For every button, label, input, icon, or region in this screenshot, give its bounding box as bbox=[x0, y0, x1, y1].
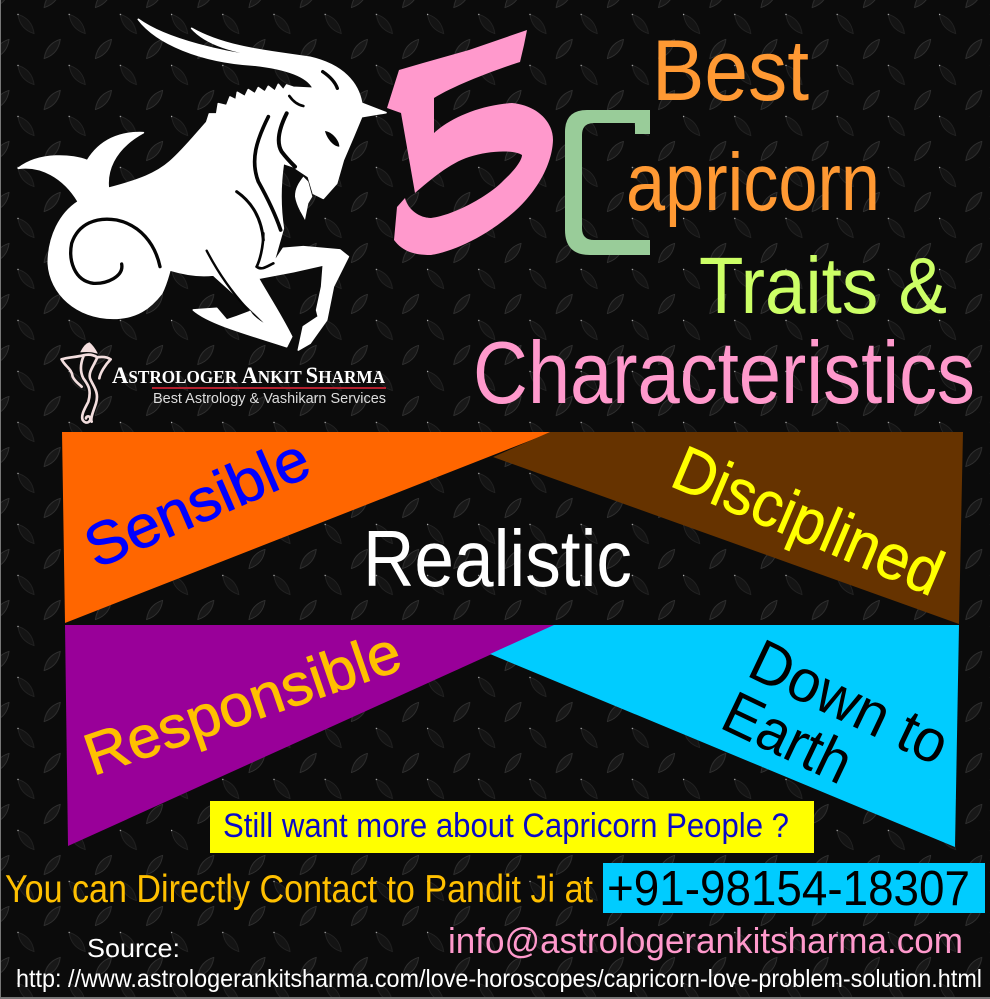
callout: more about capricorn bbox=[210, 801, 814, 853]
goat eye bbox=[325, 131, 339, 147]
logo text bbox=[112, 363, 386, 407]
big number 5 bbox=[387, 30, 553, 255]
logo text: ASTROLOGER ANKIT SHARMA bbox=[112, 363, 385, 388]
icon: ganesha logo mark bbox=[62, 343, 111, 423]
panel: sensible bbox=[62, 425, 552, 623]
panel: disciplined bbox=[493, 432, 963, 624]
text: source label: Source: bbox=[87, 933, 180, 963]
panel: responsible bbox=[65, 618, 556, 846]
title text bbox=[473, 23, 975, 422]
big letter C bbox=[565, 110, 650, 255]
panel: down to earth bbox=[490, 625, 960, 847]
title text: apricorn bbox=[626, 137, 880, 228]
text: contact line: You can Directly Contact to Pandit Ji at bbox=[5, 868, 593, 911]
text: realistic: Realistic bbox=[363, 514, 632, 603]
title text: Traits & bbox=[699, 241, 947, 330]
icon: capricorn goat bbox=[18, 19, 386, 350]
panel: disciplined: Disciplined bbox=[663, 432, 954, 610]
panel: sensible: Sensible bbox=[74, 425, 319, 581]
title text: Best bbox=[652, 23, 809, 119]
panel: down to earth: Down to bbox=[739, 626, 960, 778]
phone number: +91-98154-18307 bbox=[607, 862, 970, 916]
panel: responsible: Responsible bbox=[76, 618, 409, 788]
text: email: info@astrologerankitsharma.com bbox=[448, 920, 963, 961]
callout: more about capricorn: Still want more about Capricorn People ? bbox=[223, 807, 789, 845]
goat beard bbox=[295, 177, 312, 220]
panel: down to earth: Earth bbox=[712, 678, 863, 797]
logo text: Best Astrology & Vashikarn Services bbox=[153, 390, 386, 407]
